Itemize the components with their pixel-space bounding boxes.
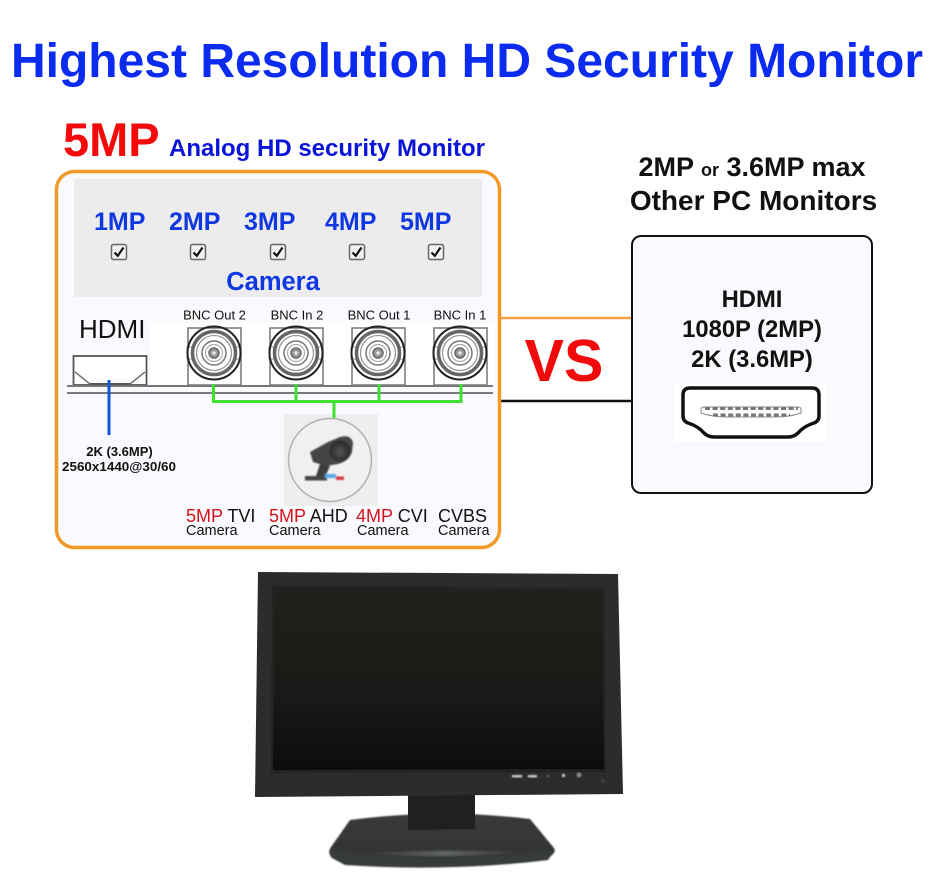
- title: Highest Resolution HD Security Monitor: [11, 35, 923, 88]
- checkboxes: [112, 244, 444, 260]
- resolution labels: 4MP: [325, 208, 376, 236]
- camera type labels: [186, 506, 491, 539]
- connector: black VS line: [500, 400, 632, 402]
- icon: HDMI port: [74, 356, 146, 385]
- heading: 5MP analog HD security monitor: Analog HD security Monitor: [169, 135, 485, 162]
- icon: BNC connectors: [187, 326, 487, 385]
- heading: other PC monitors: 2MP or 3.6MP max: [638, 152, 866, 182]
- connector: orange VS line: [500, 317, 632, 319]
- monitor photo: [255, 572, 623, 868]
- HDMI resolution note: 2560x1440@30/60: [62, 459, 176, 474]
- resolution labels: 2MP: [169, 208, 220, 236]
- panel: camera resolution support: [74, 179, 482, 297]
- heading: 5MP analog HD security monitor: 5MP: [63, 113, 160, 166]
- camera type labels: Camera: [357, 523, 410, 539]
- camera type labels: Camera: [186, 523, 239, 539]
- monitor base: [329, 814, 555, 868]
- rail: [67, 386, 493, 393]
- heading: other PC monitors: [630, 152, 877, 216]
- white band behind connectors: [150, 323, 495, 385]
- HDMI spec text: 1080P (2MP): [682, 316, 822, 343]
- monitor screen: [273, 588, 604, 770]
- BNC labels: [183, 308, 486, 322]
- BNC labels: BNC Out 2: [183, 308, 246, 322]
- monitor neck: [408, 795, 475, 830]
- BNC labels: BNC Out 1: [348, 308, 410, 322]
- resolution labels: 3MP: [244, 208, 295, 236]
- camera type labels: 5MP AHD: [269, 506, 348, 526]
- camera type labels: 4MP CVI: [356, 506, 428, 526]
- HDMI resolution note: [62, 444, 176, 474]
- monitor buttons: [512, 772, 604, 782]
- resolution labels: 1MP: [94, 208, 145, 236]
- monitor inner bezel: [271, 585, 606, 773]
- HDMI spec text: 2K (3.6MP): [691, 346, 813, 373]
- HDMI spec text: HDMI: [722, 286, 782, 313]
- icon: camera: [284, 414, 378, 506]
- camera type labels: CVBS: [438, 506, 487, 526]
- panel: 5MP analog HD monitor: [56, 172, 500, 548]
- camera type labels: Camera: [438, 523, 491, 539]
- heading: 5MP analog HD security monitor: [63, 113, 485, 166]
- camera type labels: 5MP TVI: [186, 506, 255, 526]
- HDMI resolution note: 2K (3.6MP): [86, 444, 153, 459]
- HDMI spec text: [682, 286, 822, 373]
- camera type labels: Camera: [269, 523, 322, 539]
- VS label: VS: [525, 328, 603, 394]
- HDMI label: HDMI: [79, 314, 145, 344]
- monitor bezel: [255, 572, 623, 797]
- BNC labels: BNC In 2: [271, 308, 323, 322]
- resolution labels: [94, 208, 451, 236]
- heading: other PC monitors: Other PC Monitors: [630, 185, 877, 216]
- BNC labels: BNC In 1: [434, 308, 486, 322]
- blue HDMI line: [108, 380, 110, 435]
- green wiring: [214, 384, 461, 418]
- icon: HDMI connector: [675, 384, 827, 442]
- camera label: Camera: [226, 268, 321, 296]
- resolution labels: 5MP: [400, 208, 451, 236]
- panel: HDMI PC monitor: [632, 236, 872, 493]
